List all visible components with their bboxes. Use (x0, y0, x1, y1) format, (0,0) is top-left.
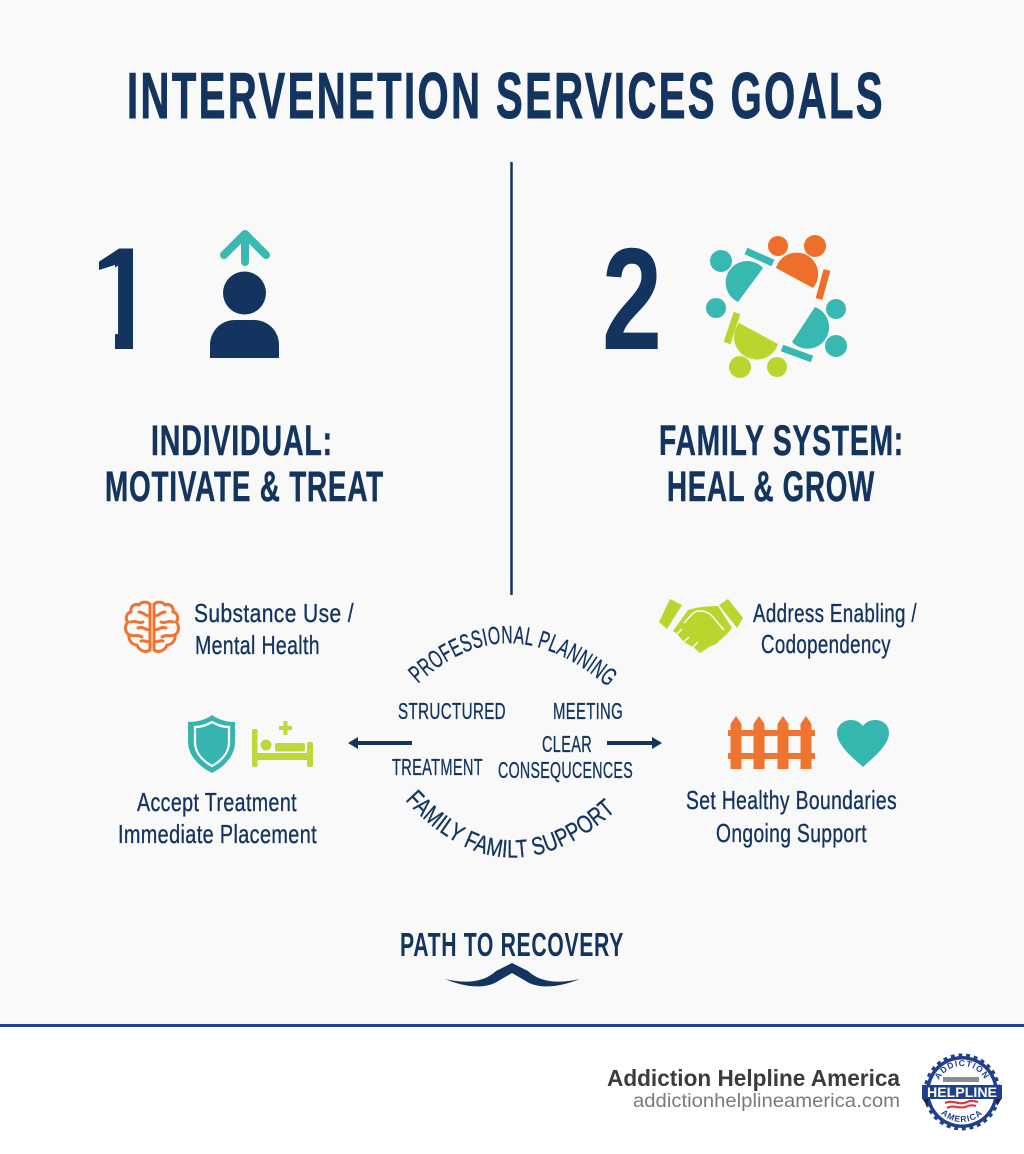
logo badge: AMERICA (941, 1110, 982, 1122)
heading: family system: FAMILY SYSTEM: (659, 417, 904, 465)
curved text: professional planning: PROFESSIONAL PLANNING (408, 626, 616, 685)
number 1: 1 (84, 217, 165, 380)
item: substance use (125, 598, 354, 660)
logo badge: ADDICTION (935, 1060, 990, 1080)
label: substance use: Substance Use / (194, 598, 354, 628)
heading: family system: HEAL & GROW (667, 463, 875, 511)
label: address enabling: Address Enabling / (753, 598, 917, 628)
central cycle (348, 626, 662, 858)
label: accept treatment: Accept Treatment (137, 787, 297, 817)
brand url: addictionhelplineamerica.com (633, 1090, 900, 1112)
icon: person with up arrow (210, 234, 279, 358)
icon: shield (188, 715, 235, 773)
label: treatment: TREATMENT (392, 754, 483, 780)
label: accept treatment: Immediate Placement (118, 819, 317, 849)
curved text: family support: FAMILY FAMILT SUPPORT (406, 789, 612, 858)
label: substance use (194, 598, 354, 660)
arrow: right (607, 737, 662, 749)
label: accept treatment (118, 787, 317, 849)
item: set healthy boundaries (686, 716, 897, 848)
item: accept treatment (118, 715, 317, 849)
path to recovery (400, 926, 624, 986)
brand name: Addiction Helpline America (607, 1065, 900, 1091)
label: set healthy boundaries: Ongoing Support (716, 818, 867, 848)
footer brand (607, 1054, 1002, 1130)
icon: family circle (706, 235, 847, 378)
logo badge: HELPLINE (927, 1084, 997, 1100)
panel: family system (602, 218, 904, 511)
logo badge (922, 1054, 1002, 1130)
arrow: left (348, 737, 412, 749)
icon: swoosh (445, 963, 580, 986)
label: address enabling: Codopendency (761, 629, 891, 659)
icon: hospital bed (252, 721, 313, 767)
path to recovery: PATH TO RECOVERY (400, 926, 624, 963)
number 2: 2 (602, 218, 662, 380)
label: structured: STRUCTURED (398, 698, 506, 724)
item: address enabling (659, 598, 917, 659)
label: address enabling (753, 598, 917, 659)
icon: fence (728, 716, 815, 769)
heading: individual: MOTIVATE & TREAT (105, 463, 384, 511)
panel: individual (99, 230, 384, 502)
label: meeting: MEETING (553, 698, 623, 724)
icon: heart (837, 720, 889, 767)
label: substance use: Mental Health (195, 630, 320, 660)
label: set healthy boundaries: Set Healthy Boundaries (686, 785, 897, 815)
icon: brain (125, 602, 179, 651)
heading: family system (659, 417, 904, 511)
label: consequences: CONSEQUCENCES (498, 757, 633, 783)
heading: individual (105, 417, 384, 511)
label: set healthy boundaries (686, 785, 897, 848)
icon: handshake (659, 599, 743, 653)
heading: individual: INDIVIDUAL: (151, 417, 333, 465)
label: clear: CLEAR (542, 731, 592, 757)
